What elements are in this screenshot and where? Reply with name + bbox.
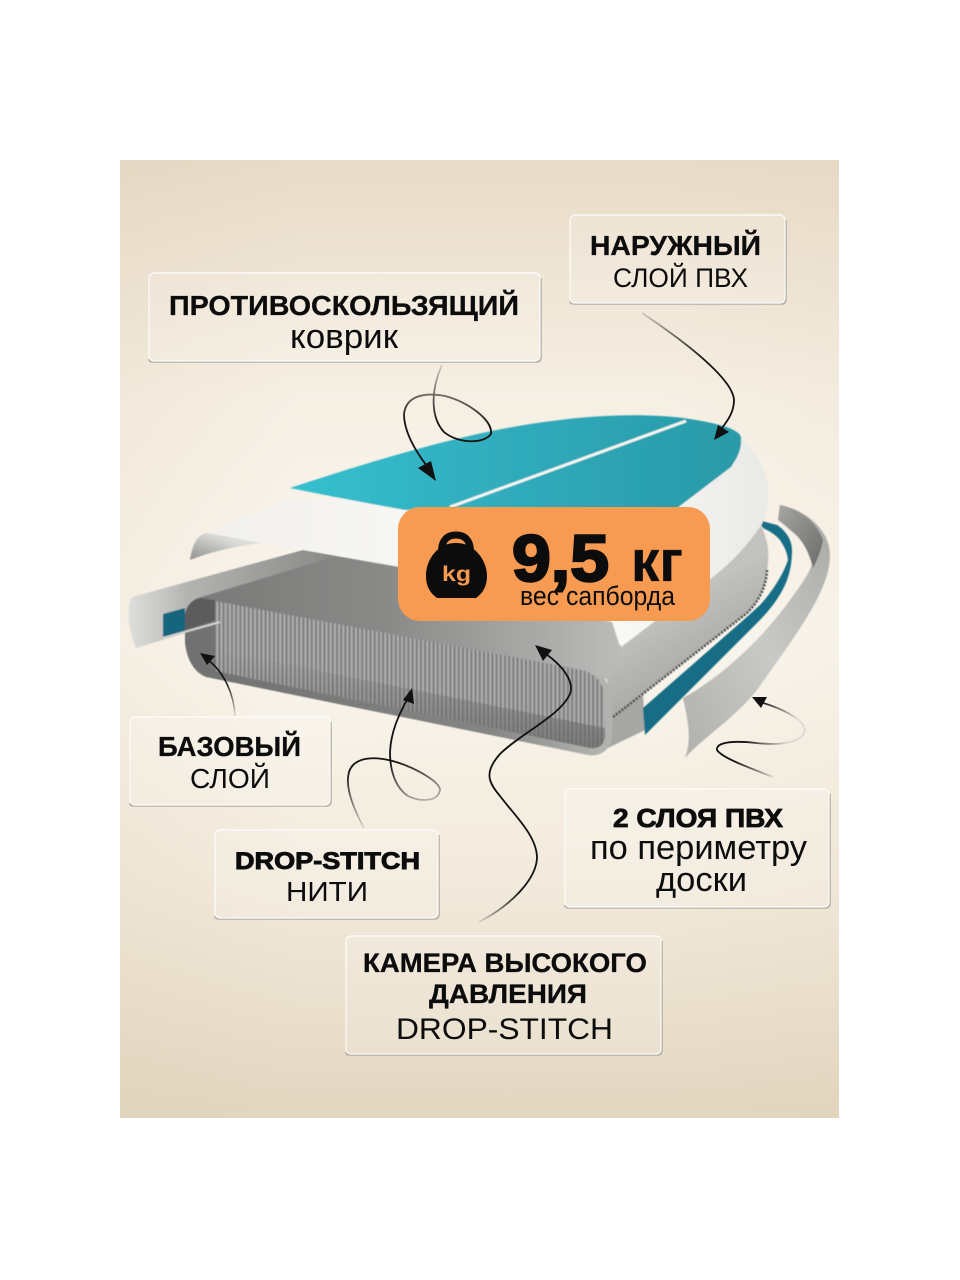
background panel (120, 160, 839, 1118)
icon: kettlebell weight (426, 535, 487, 598)
callout: base layer: БАЗОВЫЙ (158, 730, 301, 762)
callout: base layer: СЛОЙ (190, 763, 270, 794)
callout: outer PVC layer: СЛОЙ ПВХ (613, 262, 748, 293)
white curl underside (190, 533, 262, 560)
callout: drop-stitch threads: НИТИ (286, 876, 368, 907)
callout: two PVC layers: доски (656, 861, 747, 899)
callout: two PVC layers: по периметру (590, 829, 807, 867)
icon: kettlebell weight: kg (442, 563, 471, 586)
thread fringe (215, 650, 605, 748)
board frame (185, 598, 613, 755)
teal side strip (643, 520, 792, 735)
weight unit: кг (631, 529, 683, 594)
left strip edge (163, 622, 220, 638)
arrow: drop-stitch threads (348, 688, 440, 828)
callout: non-slip mat: ПРОТИВОСКОЛЬЗЯЩИЙ (169, 289, 519, 321)
callout: non-slip mat: коврик (290, 318, 399, 356)
left teal strip (163, 608, 185, 637)
teal non-slip mat (290, 415, 741, 512)
arrow: base layer (200, 653, 235, 716)
flap inner surface (778, 505, 823, 568)
weight value: 9,5 (512, 521, 609, 595)
callout: base layer (130, 717, 331, 806)
callout: drop-stitch threads: DROP-STITCH (235, 848, 420, 875)
mat centre line (450, 421, 686, 507)
callout: non-slip mat (149, 273, 541, 362)
callout: high pressure chamber: DROP-STITCH (396, 1013, 613, 1046)
callout: outer PVC layer: НАРУЖНЫЙ (590, 229, 761, 261)
callout: drop-stitch threads (215, 830, 439, 919)
grey top layer (198, 550, 621, 680)
frame pocket (185, 598, 215, 630)
arrow: two PVC layers (717, 697, 805, 777)
outer PVC flap right (683, 505, 830, 758)
arrow: non-slip mat (404, 365, 491, 481)
callout: two PVC layers (565, 789, 830, 908)
lower side strip (600, 695, 645, 752)
white PVC layer (207, 437, 768, 647)
callout: two PVC layers: 2 СЛОЯ ПВХ (613, 803, 784, 833)
callout: high pressure chamber: КАМЕРА ВЫСОКОГО (363, 948, 647, 978)
board illustration (129, 415, 830, 758)
callout: high pressure chamber: ДАВЛЕНИЯ (429, 979, 587, 1009)
arrow: outer PVC (642, 313, 734, 440)
left flap (129, 550, 333, 648)
callout: high pressure chamber (346, 936, 662, 1055)
seam stitching (613, 570, 767, 717)
weight caption: вес сапборда (520, 581, 676, 611)
drop-stitch threads (215, 601, 605, 748)
arrow: high pressure chamber (479, 645, 571, 922)
callout: outer PVC layer (570, 215, 786, 304)
weight badge (398, 507, 710, 621)
board side wall (604, 523, 768, 717)
